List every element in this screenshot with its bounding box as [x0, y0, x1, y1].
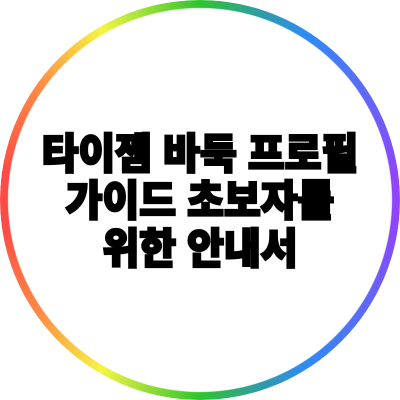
title line 1: 타이젬 바둑 프로필: [42, 132, 358, 178]
title line 3: 위한 안내서: [102, 227, 298, 273]
title line 2: 가이드 초보자를: [66, 179, 334, 225]
